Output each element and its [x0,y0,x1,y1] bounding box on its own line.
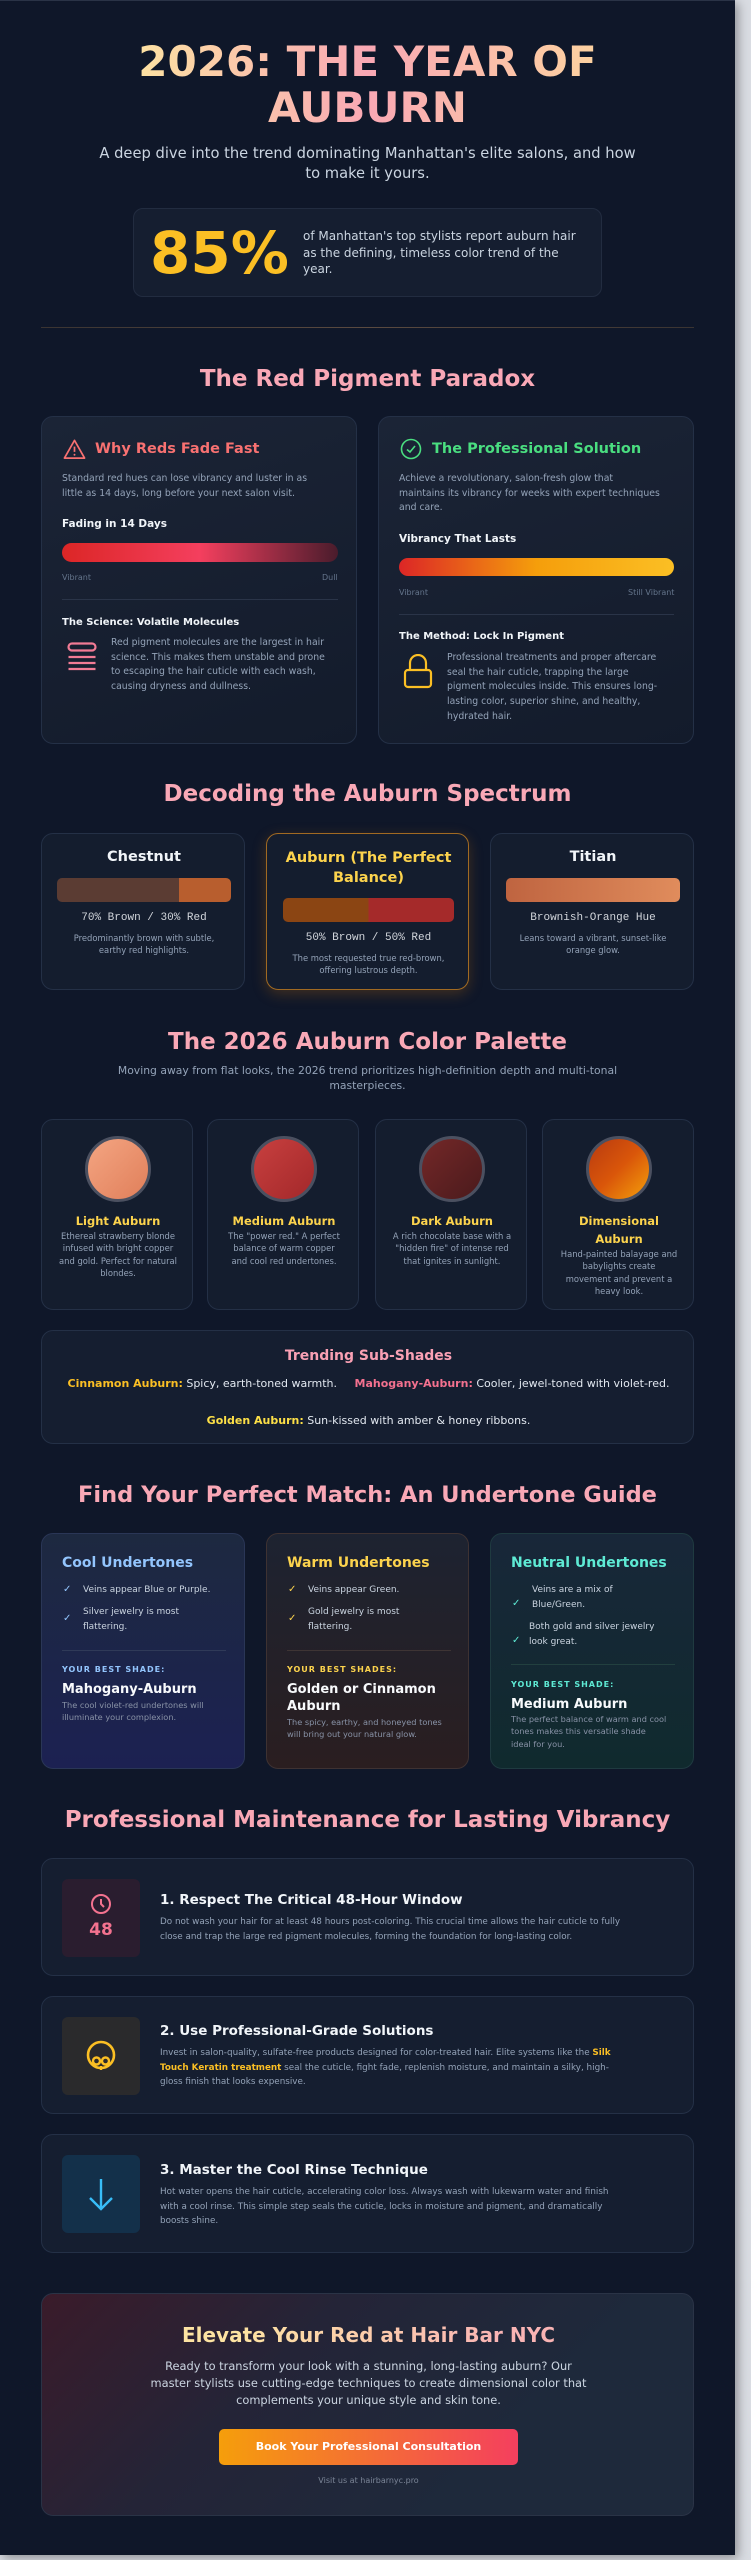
panel: warm undertones [266,1533,469,1769]
panel: call to action [41,2293,694,2516]
panel: warm undertones: Veins appear Green. [308,1585,399,1595]
panel: why reds fade: Fading in 14 Days [62,518,167,530]
stat text: of Manhattan's top stylists report auburn hair [303,229,576,243]
panel: step 3: with a cool rinse. This simple step seals the cuticle, locks in moisture and pigment, and dramatically [160,2202,602,2212]
panel: dimensional auburn [542,1119,694,1310]
panel: professional solution: seal the hair cuticle, trapping the large [447,667,629,678]
panel: why reds fade: The Science: Volatile Molecules [62,617,239,628]
bar: auburn [283,898,454,922]
icon: clock 48: 48 [89,1920,113,1940]
panel: auburn balance [266,833,469,990]
heading: red pigment paradox: The Red Pigment Paradox [200,366,535,392]
panel: neutral undertones: ✓ [512,1635,520,1646]
panel: medium auburn: Medium Auburn [233,1214,335,1228]
panel: light auburn: infused with bright copper [63,1243,173,1253]
stat box [133,208,602,297]
cta text: Ready to transform your look with a stunning, long-lasting auburn? Our [165,2359,572,2373]
panel: cool undertones: ✓ [63,1584,71,1595]
panel: cool undertones: Silver jewelry is most [83,1607,179,1617]
panel: why reds fade: Red pigment molecules are the largest in hair [111,637,324,648]
panel: professional solution: Professional treatments and proper aftercare [447,652,656,663]
panel: neutral undertones: look great. [529,1637,577,1647]
heading: decoding spectrum: Decoding the Auburn Spectrum [164,781,571,807]
icon: warning [64,440,86,459]
panel: professional solution: pigment molecules inside. This ensures long- [447,681,657,692]
icon: product [62,2017,140,2095]
panel: cool undertones: Veins appear Blue or Purple. [83,1585,210,1595]
panel: cool undertones: The cool violet-red undertones will [62,1700,204,1710]
panel: dimensional auburn: Hand-painted balayage and [561,1249,677,1259]
panel: cool undertones: Cool Undertones [62,1555,193,1571]
panel: dark auburn: Dark Auburn [411,1214,493,1228]
panel: cool undertones: Mahogany-Auburn [62,1682,197,1697]
stat number: 85% [150,219,289,287]
icon: check circle [400,438,422,460]
panel: neutral undertones: Both gold and silver jewelry [529,1622,654,1632]
panel: professional solution: Vibrancy That Lasts [399,533,516,545]
panel: neutral undertones: ideal for you. [511,1739,565,1749]
panel: step 2: Touch Keratin treatment seal the cuticle, fight fade, replenish moisture, and maintain a silky, high- [160,2063,609,2073]
panel: why reds fade: to escaping the hair cuticle with each wash, [111,666,316,677]
panel: neutral undertones: Medium Auburn [511,1697,627,1712]
icon: clock 48 [62,1879,140,1957]
panel: warm undertones: flattering. [308,1622,352,1632]
panel: warm undertones: YOUR BEST SHADES: [287,1665,397,1674]
panel: neutral undertones: Blue/Green. [532,1600,585,1610]
bar: chestnut [57,878,231,902]
panel: cool undertones: ✓ [63,1613,71,1624]
panel: neutral undertones: Neutral Undertones [511,1555,667,1571]
panel: warm undertones: Auburn [287,1699,341,1714]
panel: professional solution: and care. [399,502,443,513]
palette subtitle [118,1064,617,1092]
panel: trending sub-shades: Trending Sub-Shades [285,1348,452,1364]
panel: dimensional auburn: Dimensional [579,1214,659,1228]
cta heading [42,2322,695,2348]
text [62,473,307,499]
panel: step 1: close and trap the large red pigment molecules, forming the foundation for long-lasting color. [160,1932,572,1942]
text: Standard red hues can lose vibrancy and luster in as [62,473,307,484]
panel: light auburn: and gold. Perfect for natural [59,1256,177,1266]
panel: professional solution: Vibrant [399,588,428,597]
panel: chestnut [41,833,245,990]
heading: undertone guide: Find Your Perfect Match: An Undertone Guide [78,1482,657,1508]
palette subtitle: Moving away from flat looks, the 2026 trend prioritizes high-definition depth and multi-tonal [118,1064,617,1077]
panel: professional solution: The Method: Lock In Pigment [399,631,564,642]
panel: auburn balance: Balance) [333,870,404,886]
panel: light auburn: blondes. [100,1268,136,1278]
panel: dimensional auburn: babylights create [583,1261,655,1271]
panel: trending sub-shades [41,1330,694,1444]
subtitle: A deep dive into the trend dominating Manhattan's elite salons, and how [99,145,636,162]
heading: Why Reds Fade Fast [95,441,259,457]
panel: professional solution: Achieve a revolutionary, salon-fresh glow that [399,473,613,484]
panel: step 2: 2. Use Professional-Grade Solutions [160,2023,433,2039]
panel: medium auburn: The "power red." A perfect [228,1231,340,1241]
panel: professional solution: The Professional Solution [432,441,641,457]
panel: neutral undertones: tones makes this versatile shade [511,1726,646,1736]
panel: medium auburn: and cool red undertones. [231,1256,337,1266]
bar: fading [62,543,338,562]
button: Book Your Professional Consultation [256,2440,481,2453]
panel: neutral undertones: ✓ [512,1598,520,1609]
panel: why reds fade: causing dryness and dullness. [111,681,251,692]
panel: chestnut: 70% Brown / 30% Red [81,912,207,924]
swatch [85,1136,151,1202]
panel: trending sub-shades: Cinnamon Auburn: Spicy, earth-toned warmth. Mahogany-Auburn: Cooler, jewel-toned with violet-red. [68,1377,669,1390]
panel: step 2 [41,1996,694,2114]
panel: light auburn: Ethereal strawberry blonde [61,1231,175,1241]
title: 2026: THE YEAR OF [138,37,597,86]
panel: dimensional auburn: heavy look. [595,1286,643,1296]
panel: professional solution: maintains its vibrancy for weeks with expert techniques [399,488,660,499]
panel: neutral undertones: The perfect balance of warm and cool [511,1714,666,1724]
stat text [303,229,576,276]
panel: step 3 [41,2134,694,2253]
panel: dark auburn: "hidden fire" of intense red [395,1243,509,1253]
panel: trending sub-shades: Golden Auburn: Sun-kissed with amber & honey ribbons. [207,1414,530,1427]
panel: neutral undertones: YOUR BEST SHADE: [511,1680,614,1689]
panel: warm undertones: Warm Undertones [287,1555,430,1571]
icon: arrow down [62,2155,140,2233]
panel: step 3: boosts shine. [160,2216,218,2226]
panel: titian: Brownish-Orange Hue [530,912,656,924]
panel: why reds fade: science. This makes them unstable and prone [111,652,325,663]
panel: professional solution: lasting color, superior shine, and healthy, [447,696,640,707]
panel: professional solution: Still Vibrant [628,588,674,597]
panel: titian [490,833,694,990]
icon: molecules [67,642,97,670]
panel: step 3: 3. Master the Cool Rinse Technique [160,2162,428,2178]
panel: titian: orange glow. [566,945,620,955]
subtitle: to make it yours. [305,164,430,182]
bar: lasting [399,558,674,576]
bar: titian [506,878,680,902]
panel: step 1 [41,1858,694,1976]
button [219,2429,518,2465]
icon: lock [404,654,432,688]
stat text: year. [303,262,332,276]
heading: palette: The 2026 Auburn Color Palette [168,1029,567,1055]
panel: neutral undertones [490,1533,694,1769]
palette subtitle: masterpieces. [329,1079,406,1092]
panel: dark auburn: A rich chocolate base with a [393,1231,511,1241]
panel: warm undertones: ✓ [288,1613,296,1624]
panel: dimensional auburn: movement and prevent a [566,1274,672,1284]
panel: warm undertones: Golden or Cinnamon [287,1682,436,1697]
panel: cool undertones: illuminate your complexion. [62,1712,176,1722]
stat text: as the defining, timeless color trend of the [303,246,559,260]
panel: cool undertones [41,1533,245,1769]
panel: why reds fade: Vibrant [62,573,91,582]
panel: warm undertones: Gold jewelry is most [308,1607,399,1617]
panel: step 2: Invest in salon-quality, sulfate-free products designed for color-treated hair. Elite systems like the Silk [160,2048,611,2058]
panel: step 1: Do not wash your hair for at least 48 hours post-coloring. This crucial time allows the hair cuticle to fully [160,1917,620,1927]
title [0,39,735,131]
panel: medium auburn: balance of warm copper [233,1243,335,1253]
panel: professional solution [378,416,694,744]
panel: warm undertones: The spicy, earthy, and honeyed tones [287,1717,442,1727]
text: little as 14 days, long before your next salon visit. [62,488,295,499]
panel: cool undertones: flattering. [83,1622,127,1632]
panel: warm undertones: will bring out your natural glow. [287,1729,417,1739]
panel: light auburn [41,1119,193,1310]
panel: auburn balance: 50% Brown / 50% Red [306,932,431,944]
panel: titian: Titian [570,849,616,865]
panel: light auburn: Light Auburn [76,1214,160,1228]
panel: step 2: gloss finish that looks expensive. [160,2077,306,2087]
panel: medium auburn [207,1119,359,1310]
panel: chestnut: earthy red highlights. [99,945,189,955]
panel: professional solution: hydrated hair. [447,711,512,722]
panel: chestnut: Chestnut [107,849,181,865]
cta text: complements your unique style and skin tone. [236,2393,501,2407]
panel: titian: Leans toward a vibrant, sunset-like [520,933,666,943]
title: AUBURN [268,83,467,132]
cta text [150,2359,586,2407]
panel: step 3: Hot water opens the hair cuticle, accelerating color loss. Always wash with lukewarm water and finish [160,2187,608,2197]
subtitle [99,145,636,182]
panel: warm undertones: ✓ [288,1584,296,1595]
panel: auburn balance: Auburn (The Perfect [286,850,451,866]
panel: dark auburn: that ignites in sunlight. [404,1256,500,1266]
panel: why reds fade: Dull [322,573,338,582]
footer link: Visit us at hairbarnyc.pro [318,2476,419,2485]
cta heading: Elevate Your Red at Hair Bar NYC [182,2323,555,2347]
panel: neutral undertones: Veins are a mix of [532,1585,613,1595]
panel: dimensional auburn: Auburn [595,1232,643,1246]
panel: auburn balance: The most requested true red-brown, [293,953,444,963]
panel: why reds fade [41,416,357,744]
panel: step 1: 1. Respect The Critical 48-Hour Window [160,1892,463,1908]
panel: auburn balance: offering lustrous depth. [319,965,418,975]
cta text: master stylists use cutting-edge techniques to create dimensional color that [150,2376,586,2390]
panel: chestnut: Predominantly brown with subtle, [74,933,214,943]
panel: cool undertones: YOUR BEST SHADE: [62,1665,165,1674]
panel: dark auburn [375,1119,527,1310]
heading: maintenance: Professional Maintenance for Lasting Vibrancy [65,1807,670,1833]
